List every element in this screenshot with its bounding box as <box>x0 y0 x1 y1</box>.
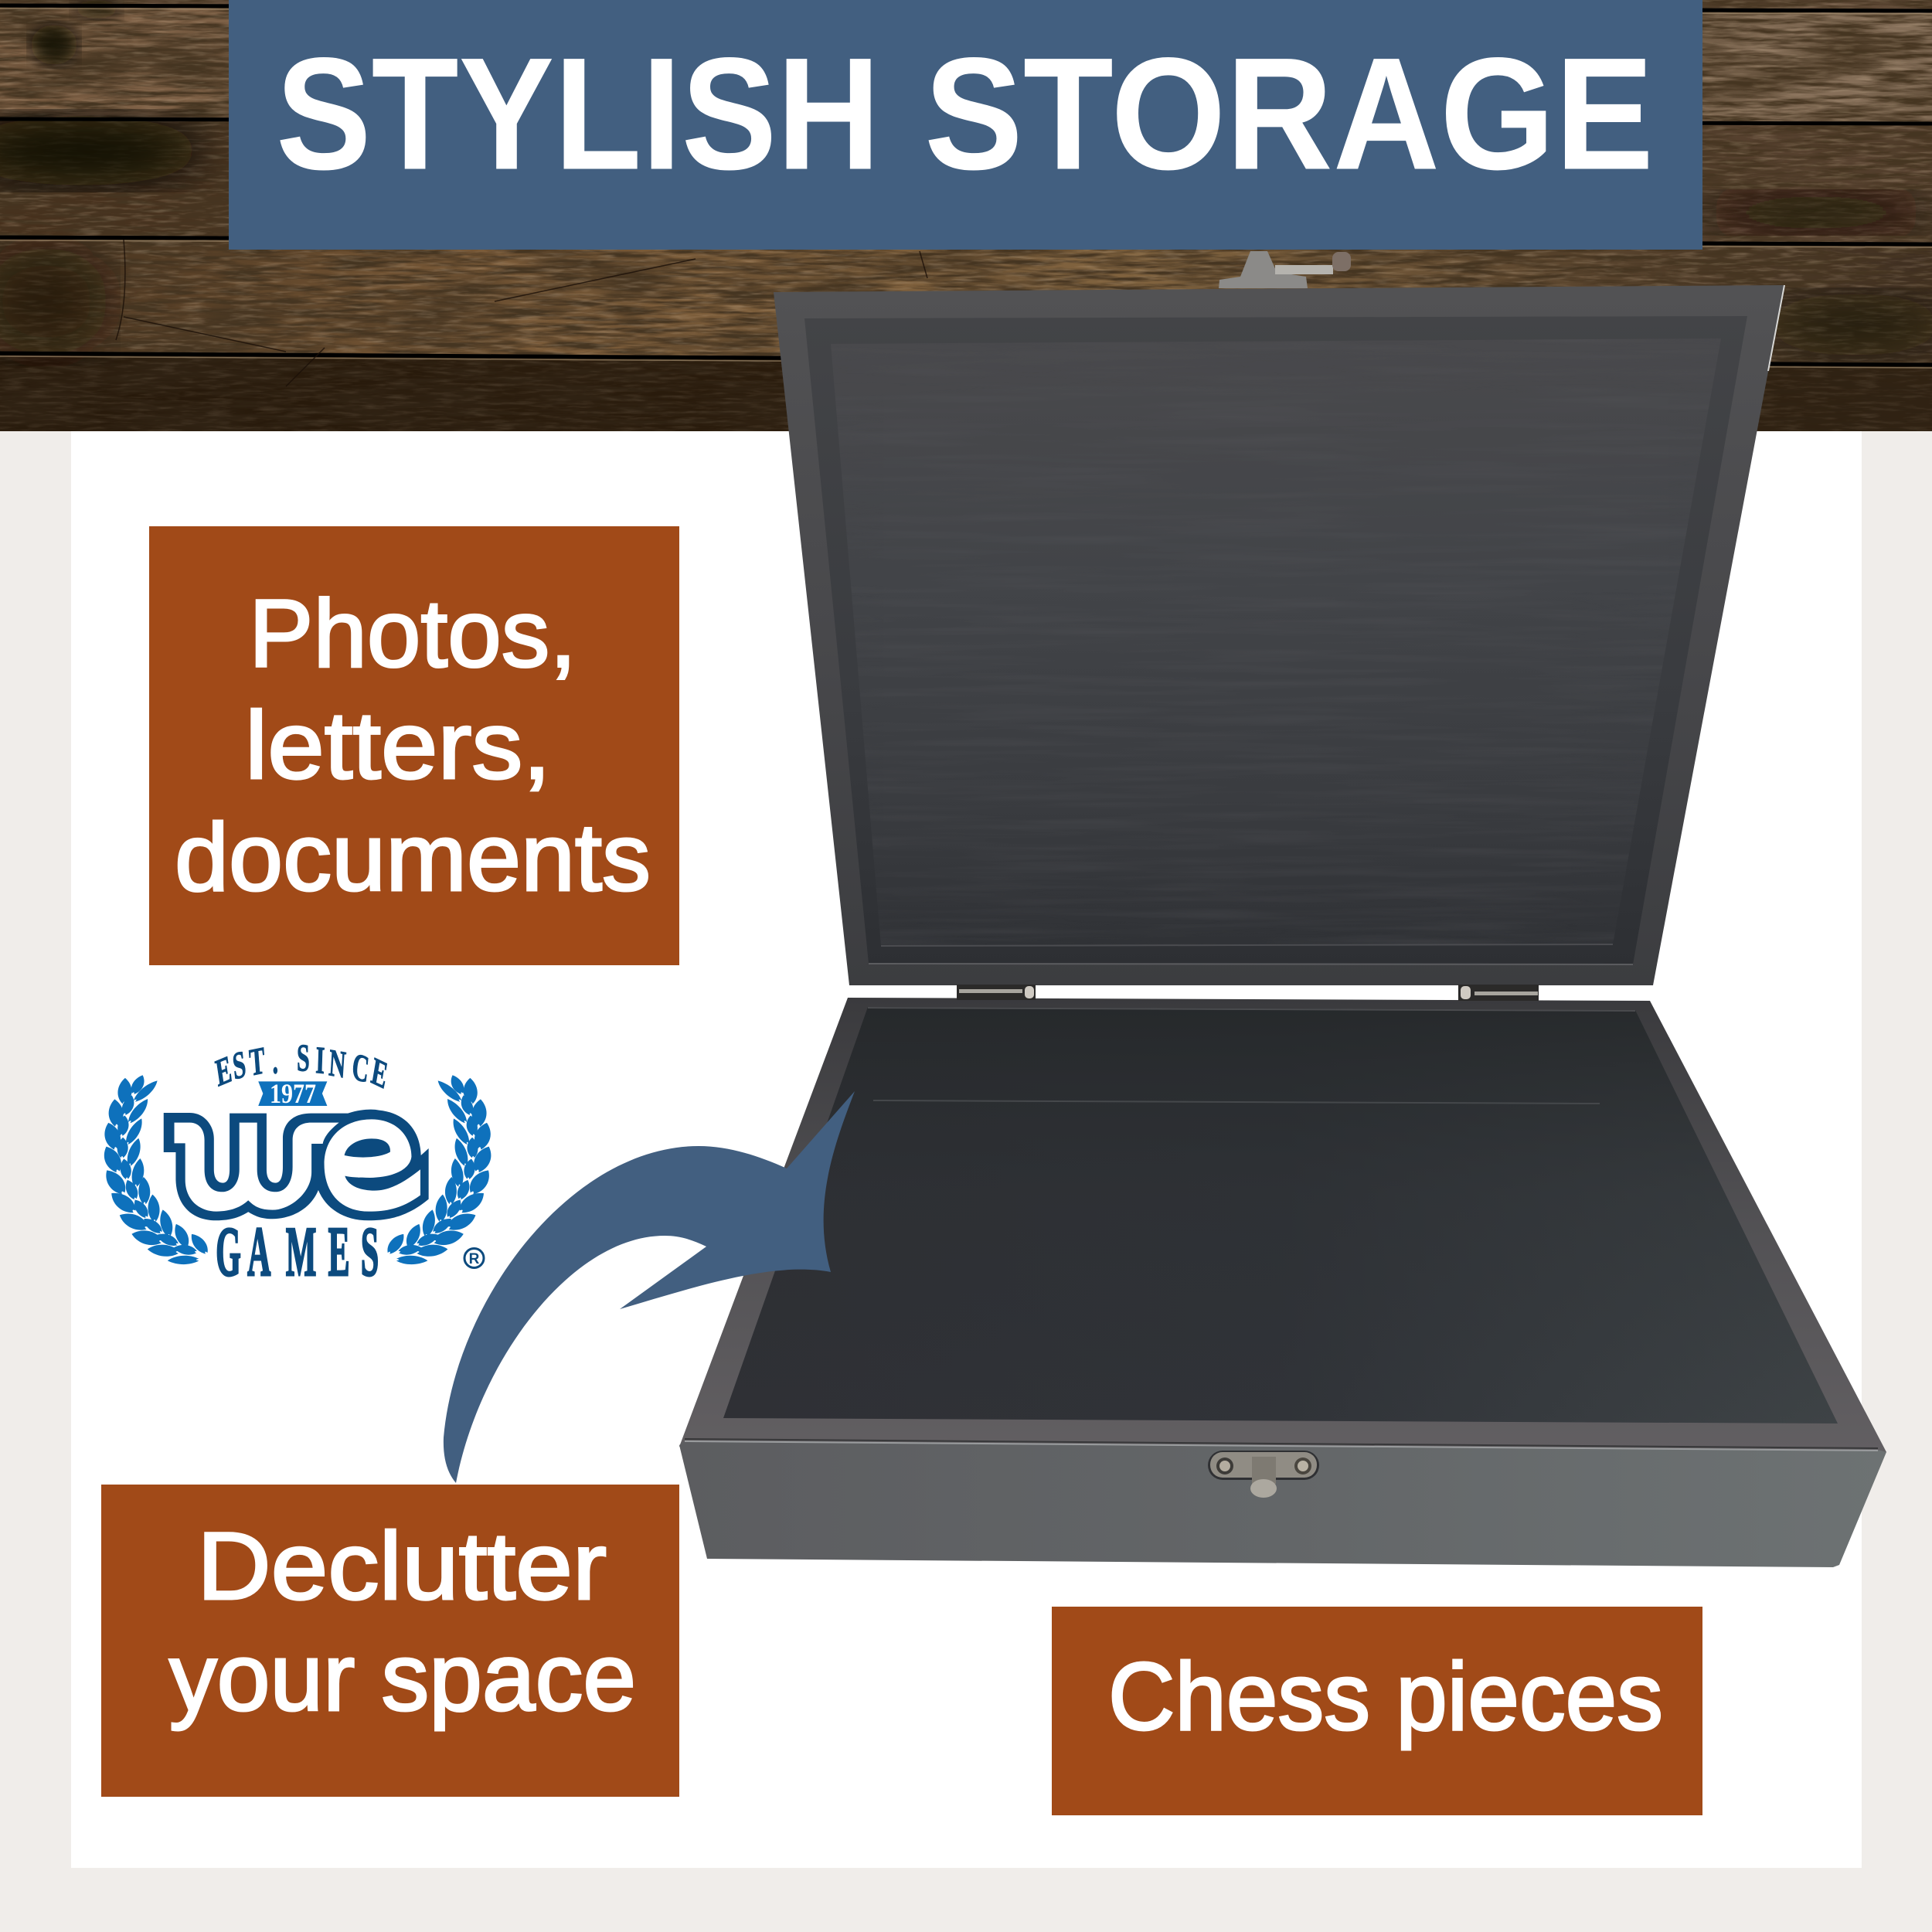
callout: declutter your space: Declutter <box>197 1513 607 1620</box>
base rim <box>679 998 1886 1452</box>
lid wood grain <box>1199 913 1450 943</box>
metal latch on the back of the lid <box>1219 251 1351 288</box>
callout: photos, letters, documents: Photos, <box>249 581 577 688</box>
callout: photos, letters, documents: letters, <box>245 692 551 799</box>
logo artwork: wreath and WE mark <box>100 1073 496 1265</box>
callout: declutter your space: your space <box>169 1624 636 1731</box>
base front face <box>679 1440 1886 1567</box>
title banner <box>229 0 1702 250</box>
logo text: EST. SINCE: EST.SINCE <box>213 1036 390 1097</box>
title text: STORAGE <box>924 25 1654 202</box>
lid edge highlight <box>1768 285 1784 371</box>
callout: declutter your space <box>101 1485 679 1797</box>
wood plank header background <box>0 0 1932 431</box>
base inner floor <box>723 1007 1838 1423</box>
title text <box>276 25 1654 202</box>
callout: chess pieces: Chess pieces <box>1108 1644 1663 1750</box>
registered mark: R <box>469 1251 480 1267</box>
lid recessed walls <box>804 316 1747 964</box>
lid outer frame <box>774 285 1784 985</box>
logo text: 1977: 1977 <box>270 1078 316 1109</box>
arrow pointing into the box <box>444 1091 855 1483</box>
logo text: GAMES: GAMES <box>216 1213 379 1291</box>
right hinge <box>1458 985 1539 1001</box>
WE Games logo <box>100 1036 496 1291</box>
base front edge highlight <box>685 1441 1878 1451</box>
lid inner panel <box>831 338 1721 946</box>
panel: white content area <box>71 431 1862 1868</box>
callout: photos, letters, documents: documents <box>175 804 651 911</box>
left hinge <box>957 985 1036 1000</box>
front clasp <box>1208 1451 1319 1498</box>
title text: STYLISH <box>276 25 880 202</box>
callout: photos, letters, documents <box>149 526 679 965</box>
callout: chess pieces <box>1052 1607 1702 1815</box>
open storage box <box>679 251 1886 1567</box>
registered mark <box>464 1249 484 1267</box>
